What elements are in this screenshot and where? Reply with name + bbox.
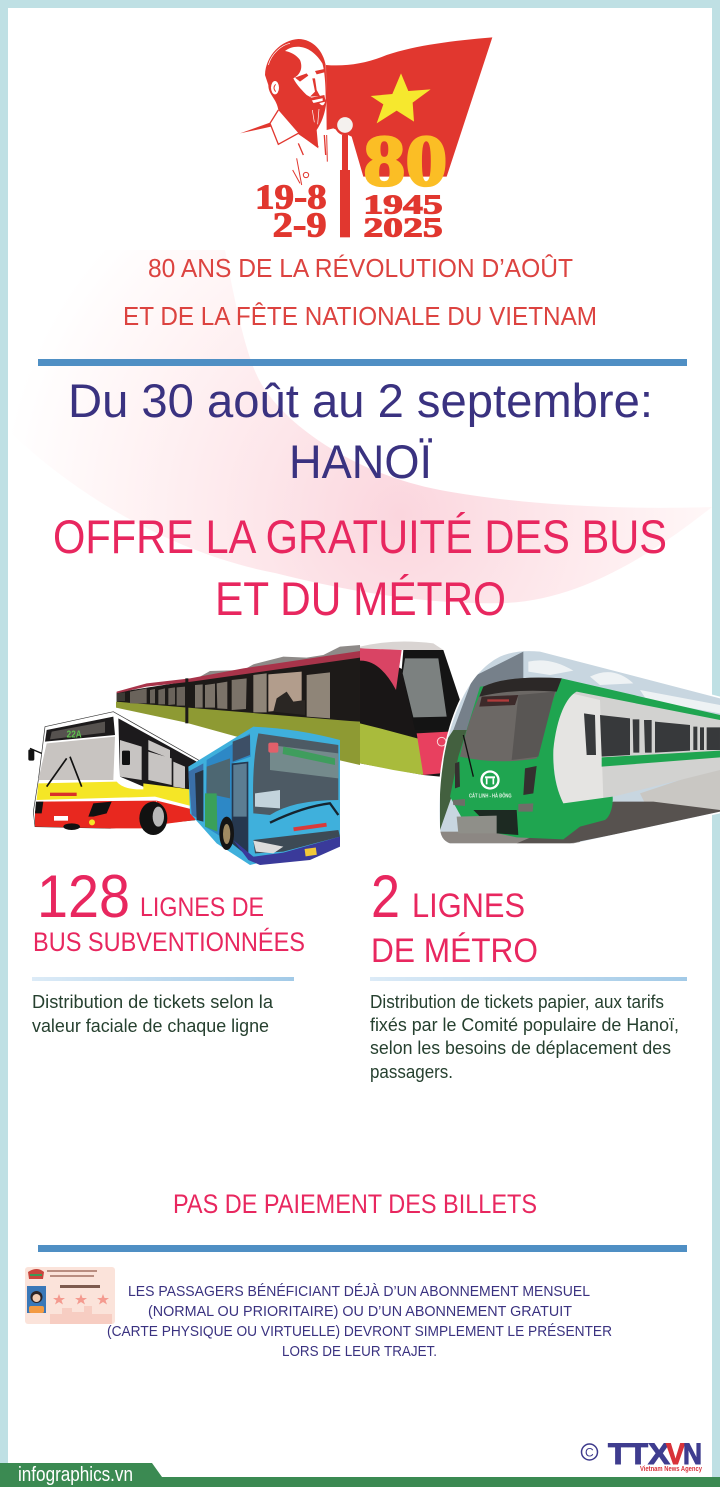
stat: bus lines: 128 [37, 863, 130, 930]
illustration: yellow and red bus [28, 712, 198, 835]
passenger note: LES PASSAGERS BÉNÉFICIANT DÉJÀ D’UN ABONNEMENT MENSUEL [128, 1283, 590, 1300]
stat: bus lines: LIGNES DE [140, 892, 264, 922]
passenger note: (NORMAL OU PRIORITAIRE) OU D’UN ABONNEMENT GRATUIT [148, 1303, 572, 1320]
metro text: fixés par le Comité populaire de Hanoï, [370, 1015, 679, 1035]
microphone [336, 116, 354, 237]
metro text: selon les besoins de déplacement des [370, 1038, 671, 1058]
date headline: HANOÏ [289, 435, 432, 488]
anniversary heading: ET DE LA FÊTE NATIONALE DU VIETNAM [123, 301, 597, 331]
bus text [32, 992, 274, 1036]
number 80: 80 [363, 120, 447, 201]
illustration: green metro train [437, 648, 720, 848]
logo: Hanoi emblem [480, 770, 500, 790]
stat: metro lines: DE MÉTRO [371, 932, 538, 970]
logo: 80th anniversary emblem [240, 37, 492, 245]
top divider [38, 359, 687, 366]
stat: bus lines [33, 863, 305, 957]
bus text: valeur faciale de chaque ligne [32, 1016, 269, 1036]
copyright logo: N [683, 1438, 702, 1471]
anniversary heading [123, 253, 597, 331]
stat: bus lines: BUS SUBVENTIONNÉES [33, 927, 305, 957]
star [371, 73, 431, 123]
dates: 19-8 [255, 178, 327, 216]
stat: metro lines: LIGNES [412, 887, 525, 925]
route number: 22A [67, 729, 82, 740]
illustration: red and green metro train [116, 641, 460, 777]
background swoosh [8, 250, 712, 603]
metro text [370, 992, 679, 1082]
copyright logo: TTX [608, 1438, 670, 1471]
date headline: Du 30 août au 2 septembre: [68, 374, 653, 427]
passenger note: (CARTE PHYSIQUE OU VIRTUELLE) DEVRONT SIMPLEMENT LE PRÉSENTER [107, 1323, 612, 1340]
metro text: passagers. [370, 1062, 453, 1082]
line name: CÁT LINH - HÀ ĐÔNG [469, 792, 512, 800]
passenger note [107, 1283, 612, 1360]
stat: metro lines: 2 [371, 863, 400, 930]
dates: 2-9 [273, 207, 327, 245]
dates: 1945 [363, 189, 443, 219]
main title: ET DU MÉTRO [215, 572, 506, 625]
footer site name: infographics.vn [18, 1464, 133, 1486]
anniversary heading: 80 ANS DE LA RÉVOLUTION D’AOÛT [148, 253, 573, 283]
illustration: blue bus [188, 727, 340, 865]
flag [326, 37, 492, 177]
icon: monthly pass card [25, 1267, 115, 1324]
dates: 2025 [363, 213, 443, 243]
section heading: PAS DE PAIEMENT DES BILLETS [173, 1189, 537, 1219]
copyright logo: C [585, 1446, 594, 1460]
metro text: Distribution de tickets papier, aux tarifs [370, 992, 664, 1012]
copyright logo: Vietnam News Agency [640, 1466, 702, 1473]
dates [255, 178, 443, 245]
bus text: Distribution de tickets selon la [32, 992, 274, 1012]
footer band [0, 1463, 720, 1487]
date headline [68, 374, 653, 488]
copyright logo: V [666, 1438, 685, 1471]
main title [53, 510, 667, 625]
copyright logo [582, 1438, 702, 1473]
stat: metro lines [371, 863, 538, 970]
portrait [240, 39, 327, 185]
passenger note: LORS DE LEUR TRAJET. [282, 1343, 437, 1360]
